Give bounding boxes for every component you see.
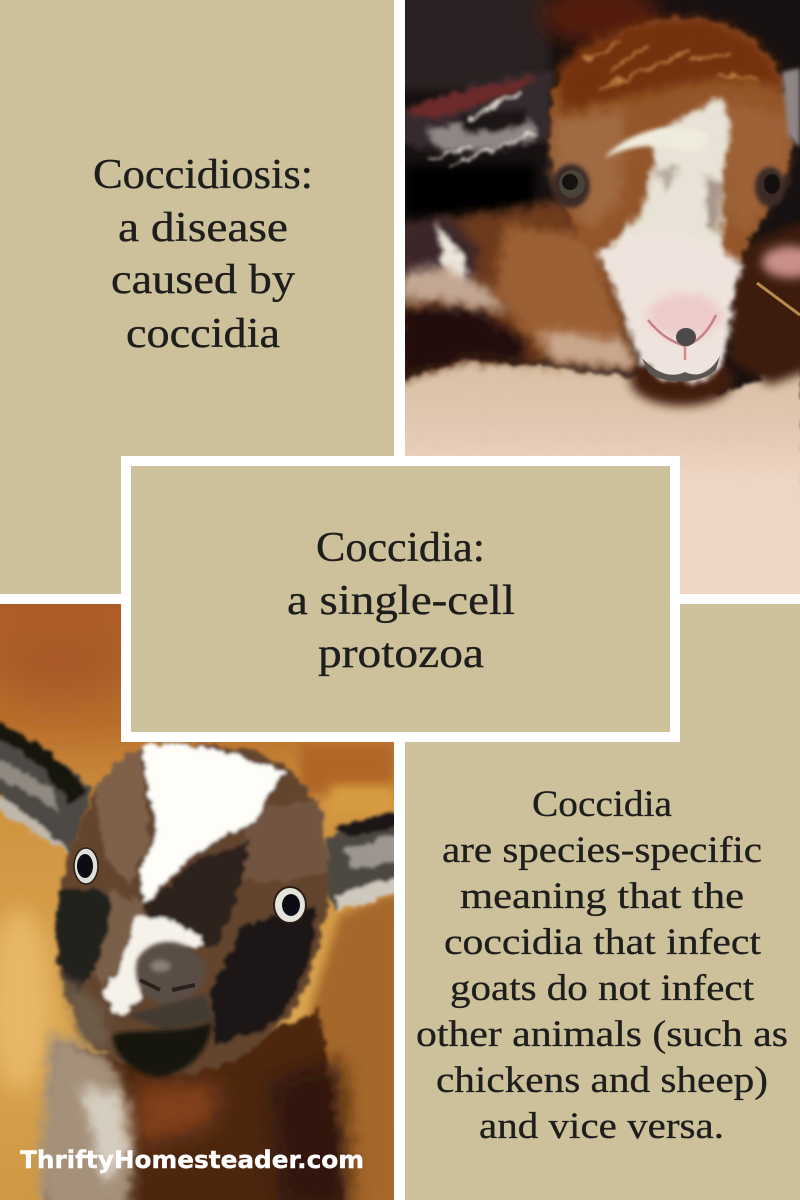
panel background <box>0 0 394 594</box>
white forehead patch <box>138 744 285 903</box>
body text: meaning that the <box>460 876 744 917</box>
brand text: ThriftyHomesteader.com <box>20 1146 364 1174</box>
photo backdrop <box>405 0 800 484</box>
heading: coccidiosis: Coccidiosis: <box>93 152 313 198</box>
left eye <box>552 164 590 208</box>
panel background <box>405 604 800 1200</box>
right ear <box>782 68 800 148</box>
snout <box>125 995 215 1030</box>
heading: coccidia: Coccidia: <box>316 525 485 571</box>
left ear <box>0 722 92 855</box>
mouth and chin <box>113 1022 212 1077</box>
right ear <box>322 812 400 910</box>
heading: coccidia <box>287 525 515 677</box>
body text: Coccidia <box>532 784 672 825</box>
nose line <box>648 315 716 346</box>
neck and chest <box>38 1010 350 1200</box>
chin shadow <box>630 354 734 406</box>
white muzzle <box>106 916 205 1015</box>
dark bridge <box>145 840 250 950</box>
nose <box>136 942 205 1005</box>
photo: baby goat with white forehead <box>0 604 400 1200</box>
panel: coccidiosis definition <box>0 0 394 594</box>
straw backdrop <box>0 604 394 1200</box>
left eye <box>74 848 98 884</box>
mouth <box>642 356 720 382</box>
center panel: coccidia definition <box>126 461 675 737</box>
towel <box>395 358 800 604</box>
right eye <box>755 167 785 207</box>
heading: coccidiosis: a disease <box>118 205 288 251</box>
lower cheek <box>60 970 110 1050</box>
body text: other animals (such as <box>416 1014 788 1055</box>
head <box>551 18 793 383</box>
body text: chickens and sheep) <box>436 1060 768 1101</box>
black cheek right <box>210 905 315 1045</box>
body text <box>416 784 788 1147</box>
heading: coccidiosis <box>93 152 313 357</box>
heading: coccidia: a single-cell <box>287 578 515 624</box>
nostril <box>676 328 696 346</box>
photo: newborn goat kid on towel <box>395 0 800 604</box>
muzzle <box>597 232 745 383</box>
brown body behind <box>304 893 394 1200</box>
right body shade <box>730 220 800 385</box>
body text: goats do not infect <box>450 968 755 1009</box>
body text: and vice versa. <box>479 1106 724 1147</box>
heading: coccidia: protozoa <box>318 631 484 677</box>
hair tuft <box>604 128 708 158</box>
body text: are species-specific <box>442 830 762 871</box>
panel: species-specific explanation <box>405 604 800 1200</box>
right eye <box>274 887 306 923</box>
left ear <box>400 72 553 165</box>
body <box>400 200 640 378</box>
white frame and tan box <box>126 461 675 737</box>
heading: coccidiosis: caused by <box>111 257 295 303</box>
heading: coccidiosis: coccidia <box>126 311 280 357</box>
head <box>56 743 330 1073</box>
body text: coccidia that infect <box>444 922 762 963</box>
black cheek left <box>56 888 112 1000</box>
white blaze <box>602 95 735 300</box>
